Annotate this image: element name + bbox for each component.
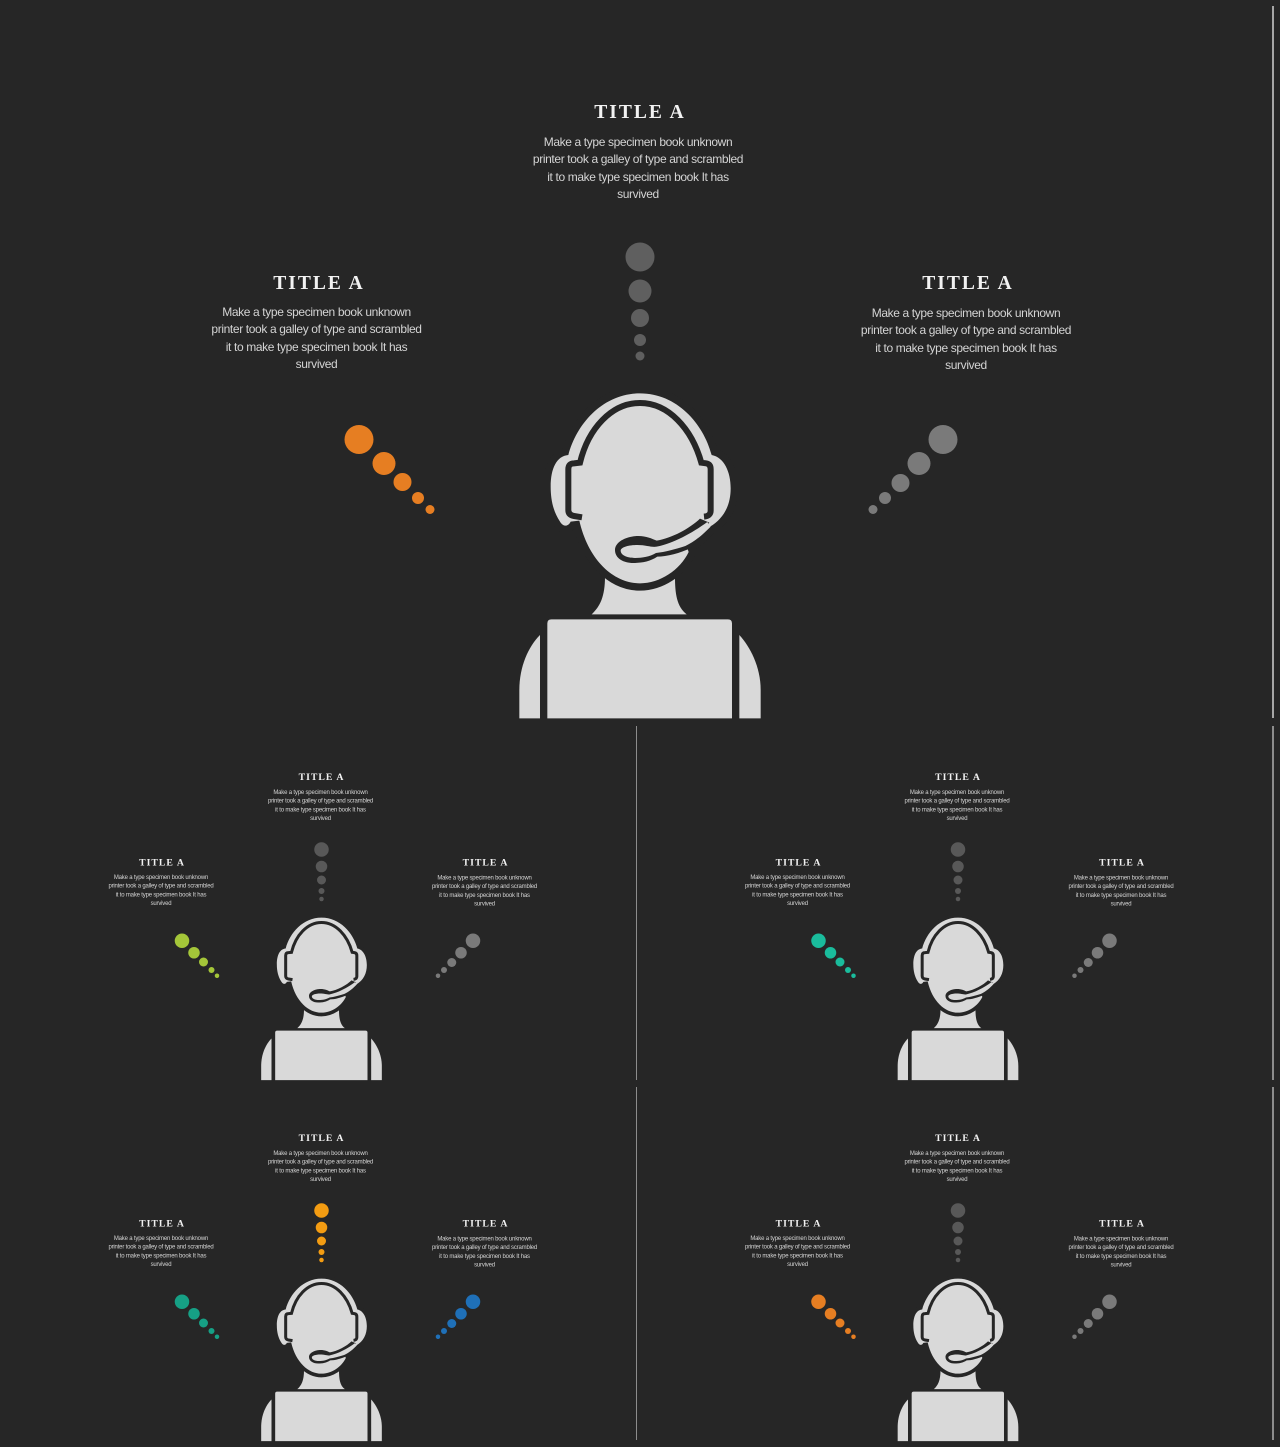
text block: left description: Make a type specimen book unknown [222,305,411,319]
text block: top description: Make a type specimen book unknown [273,790,368,796]
text block: right description [432,1236,537,1268]
heading: top title: TITLE A [935,1133,981,1144]
text block: top description [533,135,743,201]
dots: top grey [951,1203,965,1262]
text block: right description: survived [1111,1262,1131,1268]
text block: right description [1068,876,1174,908]
text block: left description: survived [151,901,171,907]
text block: left description [108,1236,214,1268]
panel: small diagram teal [745,772,1174,1080]
dots: top amber [314,1203,329,1262]
icon: person with headset [261,1279,382,1441]
text block: left description: printer took a galley of type and scrambled [211,322,422,336]
text block: right description: printer took a galley of type and scrambled [432,1245,537,1251]
heading: top title: TITLE A [935,772,981,783]
text block: left description: it to make type specimen book It has [116,1254,207,1260]
text block: top description: Make a type specimen book unknown [910,1151,1004,1157]
heading: left title: TITLE A [139,858,185,868]
text block: top description: printer took a galley of type and scrambled [533,152,743,166]
text block: right description: it to make type specimen book It has [1076,1254,1167,1260]
text block: left description: it to make type specimen book It has [752,892,843,898]
text block: left description [745,875,850,907]
icon: person with headset [898,918,1018,1080]
text block: top description [268,790,373,822]
heading: right title: TITLE A [1099,1218,1145,1230]
text block: top description: it to make type specimen book It has [275,1168,366,1174]
text block: top description: it to make type specimen book It has [912,1168,1003,1174]
text block: left description: it to make type specimen book It has [226,340,408,354]
text block: top description: printer took a galley of type and scrambled [904,798,1010,804]
text block: right description: Make a type specimen book unknown [872,306,1060,320]
text block: right description: Make a type specimen book unknown [437,1236,532,1242]
text block: left description [745,1236,850,1268]
text block: top description: Make a type specimen book unknown [273,1151,368,1157]
text block: top description: survived [310,1177,331,1183]
panel: small diagram orange [745,1133,1174,1441]
text block: top description: survived [947,816,967,822]
dots: left orange [811,1294,856,1339]
text block: top description [904,790,1010,822]
text block: right description: Make a type specimen book unknown [1074,876,1168,882]
heading: left title: TITLE A [776,858,821,868]
dots: left orange [344,425,434,514]
text block: top description: it to make type specimen book It has [912,808,1003,814]
dots: left lime [175,934,219,978]
text block: top description [268,1151,373,1183]
text block: left description: it to make type specimen book It has [752,1254,843,1260]
text block: right description: Make a type specimen book unknown [437,876,532,882]
text block: right description [861,306,1071,372]
heading: right title: TITLE A [463,858,508,868]
text block: right description: printer took a galley of type and scrambled [861,323,1071,337]
text block: right description [1068,1236,1174,1268]
heading: left title: TITLE A [273,273,365,294]
text block: top description: printer took a galley of type and scrambled [268,798,373,804]
divider: centre vertical line [636,726,637,1440]
text block: left description: it to make type specimen book It has [116,892,207,898]
heading: left title: TITLE A [776,1218,821,1230]
text block: left description: Make a type specimen book unknown [750,875,845,881]
text block: right description: printer took a galley of type and scrambled [1068,884,1174,890]
text block: right description: it to make type specimen book It has [1076,893,1167,899]
dots: top grey [314,842,329,901]
text block: top description: it to make type specimen book It has [275,808,366,814]
dots: right grey [868,425,958,514]
text block: left description: survived [151,1262,171,1268]
text block: left description [108,875,214,907]
dots: left green [175,1294,219,1339]
panel: main large headset diagram [211,102,1071,718]
text block: right description: Make a type specimen book unknown [1074,1236,1168,1242]
text block: right description: survived [474,902,495,908]
text block: left description: survived [296,357,337,371]
text block: right description: survived [945,358,987,372]
text block: left description: Make a type specimen book unknown [750,1236,845,1242]
text block: top description: Make a type specimen book unknown [544,135,732,149]
panel: small diagram green [108,772,537,1080]
text block: left description: Make a type specimen book unknown [114,875,208,881]
heading: top title: TITLE A [299,772,344,783]
text block: left description: printer took a galley of type and scrambled [745,884,850,890]
divider: right edge line [1272,6,1274,1440]
icon: person with headset [261,918,382,1080]
text block: top description: printer took a galley of type and scrambled [904,1160,1010,1166]
dots: right grey [436,934,480,978]
text block: right description: it to make type specimen book It has [875,341,1057,355]
text block: right description: printer took a galley of type and scrambled [432,884,537,890]
dots: left teal [811,934,856,978]
text block: left description: survived [787,1262,808,1268]
heading: right title: TITLE A [463,1218,508,1230]
dots: top grey [951,842,965,901]
text block: left description: printer took a galley of type and scrambled [108,884,214,890]
heading: left title: TITLE A [139,1218,185,1230]
text block: top description: printer took a galley of type and scrambled [268,1160,373,1166]
dots: right grey [1072,934,1117,978]
text block: right description: survived [474,1262,495,1268]
heading: top title: TITLE A [594,102,686,123]
dots: top grey [626,242,654,360]
text block: left description [211,305,422,371]
text block: top description: survived [947,1177,967,1183]
text block: right description: printer took a galley of type and scrambled [1068,1245,1174,1251]
text block: right description [432,876,537,908]
text block: left description: survived [787,901,808,907]
text block: top description: it to make type specimen book It has [547,170,729,184]
heading: right title: TITLE A [922,273,1014,294]
dots: right blue [436,1294,480,1339]
panel: small diagram green amber blue [108,1133,537,1441]
icon: person with headset [898,1279,1018,1441]
heading: right title: TITLE A [1099,858,1145,868]
text block: top description: Make a type specimen book unknown [910,790,1004,796]
dots: right grey [1072,1294,1117,1339]
text block: left description: Make a type specimen book unknown [114,1236,208,1242]
heading: top title: TITLE A [299,1133,344,1144]
text block: left description: printer took a galley of type and scrambled [745,1244,850,1250]
text block: top description [904,1151,1010,1183]
text block: top description: survived [310,816,331,822]
text block: right description: survived [1111,902,1131,908]
text block: left description: printer took a galley of type and scrambled [108,1244,214,1250]
text block: top description: survived [617,187,659,201]
text block: right description: it to make type specimen book It has [439,1254,530,1260]
text block: right description: it to make type specimen book It has [439,893,530,899]
icon: person with headset [519,393,761,718]
